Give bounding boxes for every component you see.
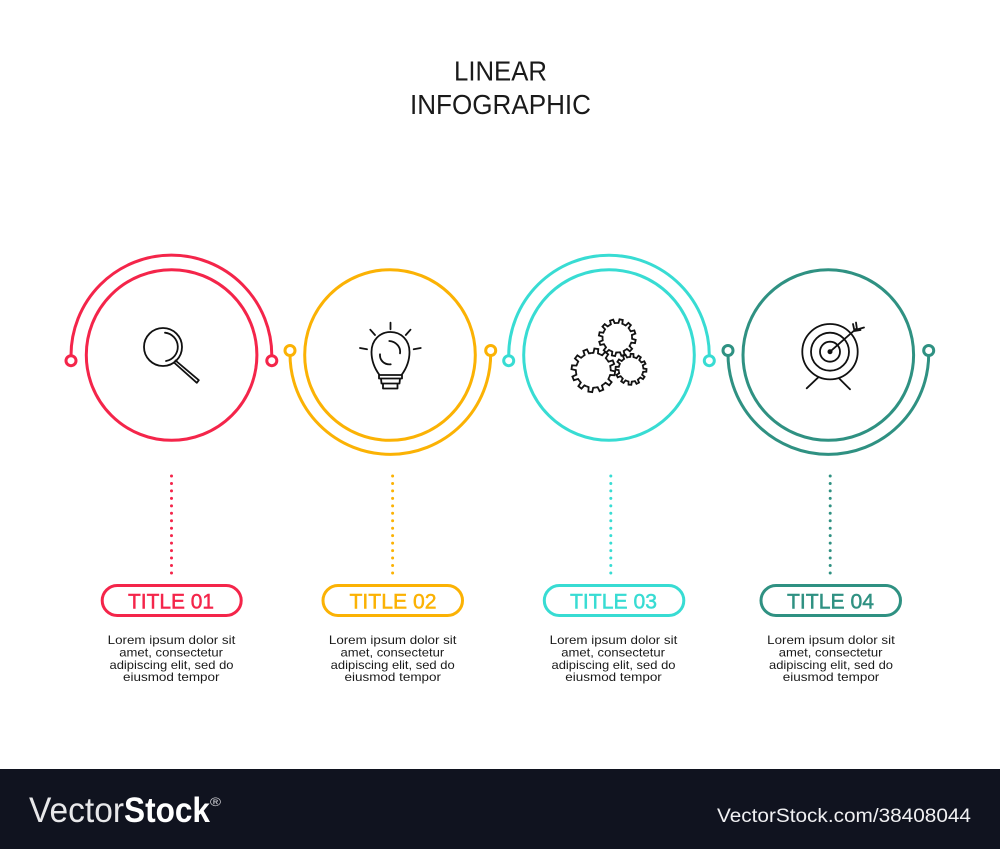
text block: step 2	[329, 633, 457, 684]
ring: step 4 circle	[743, 270, 914, 440]
text block: step 4: amet, consectetur	[779, 646, 882, 660]
title pill: step 1: TITLE 01	[128, 589, 214, 613]
title: INFOGRAPHIC	[410, 89, 591, 120]
arc: step 1 outer arc with end nodes	[66, 255, 277, 366]
text block: step 3: Lorem ipsum dolor sit	[550, 633, 678, 647]
ring: step 3 circle	[524, 270, 694, 440]
text block: step 4: Lorem ipsum dolor sit	[767, 633, 896, 647]
text block: step 2: Lorem ipsum dolor sit	[329, 633, 457, 647]
text block: step 2: adipiscing elit, sed do	[331, 658, 455, 672]
arc: step 4 outer arc with end nodes	[723, 346, 934, 454]
text block: step 4: adipiscing elit, sed do	[769, 658, 893, 672]
panel: step 1	[66, 255, 277, 684]
dotted connector: step 4	[829, 476, 832, 574]
panel: step 3	[504, 255, 714, 684]
title pill: step 1	[102, 586, 241, 616]
text block: step 3: eiusmod tempor	[565, 670, 662, 684]
title: LINEAR	[454, 56, 547, 86]
text block: step 3: adipiscing elit, sed do	[552, 658, 676, 672]
footer url: VectorStock.com/38408044	[717, 805, 971, 827]
text block: step 1: Lorem ipsum dolor sit	[108, 633, 236, 647]
text block: step 1: adipiscing elit, sed do	[110, 658, 234, 672]
icon: gears	[569, 316, 647, 395]
ring: step 1 circle	[86, 270, 257, 440]
icon: target with arrow	[802, 322, 864, 389]
title	[410, 56, 591, 120]
text block: step 2: amet, consectetur	[340, 646, 444, 660]
footer logo	[29, 791, 221, 830]
text block: step 1	[108, 633, 236, 684]
text block: step 3: amet, consectetur	[561, 646, 665, 660]
icon: magnifying glass	[144, 328, 199, 383]
dotted connector: step 1	[170, 476, 173, 574]
arc: step 2 outer arc with end nodes	[285, 346, 496, 454]
title pill: step 2	[323, 586, 462, 616]
text block: step 2: eiusmod tempor	[344, 670, 441, 684]
title pill: step 4: TITLE 04	[787, 589, 874, 613]
ring: step 2 circle	[305, 270, 475, 440]
panel: step 2	[285, 270, 496, 684]
panel: step 4	[723, 270, 934, 684]
title pill: step 3: TITLE 03	[570, 589, 657, 613]
footer band	[0, 769, 1000, 849]
footer logo: Vector	[29, 791, 124, 830]
text block: step 1: eiusmod tempor	[123, 670, 220, 684]
footer logo: Stock	[124, 791, 210, 830]
footer logo: ®	[210, 795, 221, 809]
text block: step 3	[550, 633, 678, 684]
arc: step 3 outer arc with end nodes	[504, 255, 714, 366]
dotted connector: step 3	[609, 476, 612, 574]
text block: step 4	[767, 633, 896, 684]
text block: step 1: amet, consectetur	[119, 646, 223, 660]
icon: light bulb	[360, 323, 421, 388]
title pill: step 3	[544, 586, 684, 616]
title pill: step 4	[761, 586, 900, 616]
dotted connector: step 2	[391, 476, 394, 574]
text block: step 4: eiusmod tempor	[783, 670, 879, 684]
title pill: step 2: TITLE 02	[350, 589, 436, 613]
